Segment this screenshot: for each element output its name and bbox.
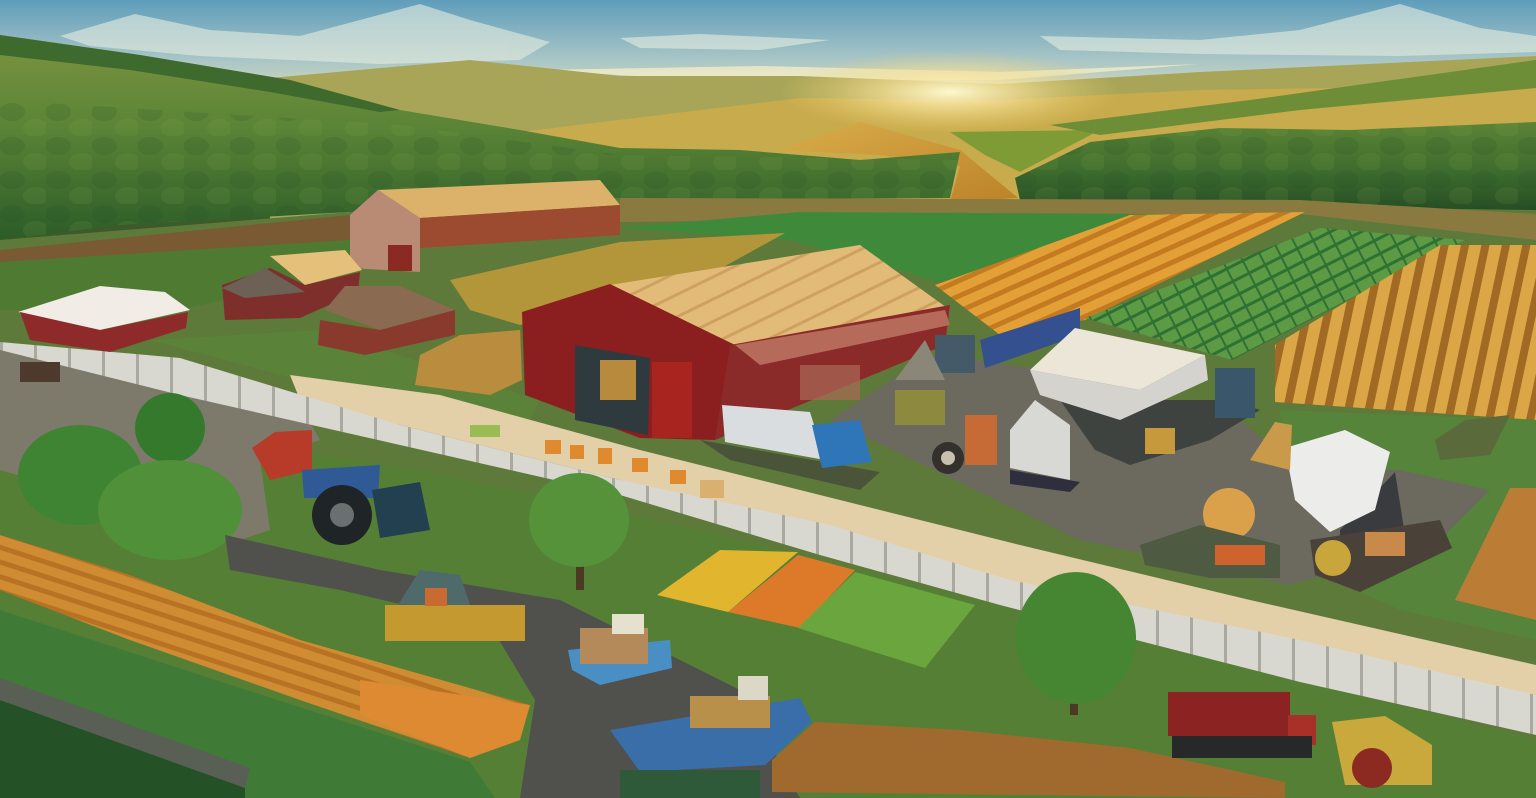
far left cart — [20, 362, 60, 382]
orange sphere equipment — [1140, 488, 1280, 578]
golden hill — [780, 122, 1018, 202]
red truck — [1168, 692, 1316, 758]
blue tractor — [302, 465, 430, 545]
back barn — [350, 180, 620, 272]
green meadow by hill — [950, 130, 1100, 172]
left road — [0, 345, 320, 540]
right tree — [1016, 572, 1136, 715]
tree center — [529, 473, 629, 590]
yellow harvester — [385, 570, 525, 641]
forest right — [1015, 122, 1536, 212]
ground base — [0, 198, 1536, 798]
bottom-right crop field — [1455, 488, 1536, 620]
small barn: brown roof — [318, 286, 455, 355]
yard road — [830, 355, 1490, 585]
small tractor right — [1435, 415, 1510, 460]
clouds — [60, 4, 1536, 64]
brown strip behind fields — [620, 198, 1536, 240]
brown strip behind barn — [0, 215, 350, 270]
blue boat cart — [568, 614, 672, 685]
barn front gable — [522, 284, 735, 440]
grass behind fence left — [150, 330, 540, 440]
white hopper machine — [1285, 430, 1452, 592]
bottom left grass — [0, 610, 495, 798]
field: golden rows — [1275, 245, 1536, 420]
forest right tree texture — [1015, 122, 1536, 212]
bottom left stone wall — [0, 678, 250, 788]
blue wagon — [610, 676, 812, 798]
sun glow — [780, 50, 1120, 134]
far hills — [270, 56, 1536, 220]
bottom left hedge — [0, 700, 245, 798]
small barn: white roof — [18, 286, 190, 352]
yard grass — [1280, 410, 1536, 640]
bushes — [18, 393, 242, 560]
white fence — [0, 342, 1536, 735]
white canopy shed — [1030, 328, 1260, 465]
forest left — [0, 35, 960, 240]
right hill band — [1050, 60, 1536, 135]
lower grass — [0, 440, 1536, 798]
field: orange rows — [935, 212, 1305, 335]
sky — [0, 0, 1536, 110]
beige path — [290, 375, 1536, 695]
hay pile right — [1250, 422, 1292, 470]
hay bales by barn — [415, 330, 522, 395]
colored crop panels — [657, 550, 975, 668]
white tanker truck — [700, 405, 880, 490]
barn side wall — [715, 305, 950, 440]
main red barn — [522, 245, 950, 440]
yellow tractor — [1332, 716, 1432, 788]
barn door opening — [575, 345, 650, 435]
red cart — [252, 430, 312, 480]
produce on path — [470, 425, 724, 498]
silo and orange tractor — [932, 400, 1080, 492]
orange crop strip — [0, 535, 530, 758]
dark ridge line — [0, 35, 400, 112]
small barn: tan roof — [222, 250, 362, 320]
brown crop strip bottom — [772, 722, 1285, 798]
field: wheat — [450, 233, 785, 325]
forest left tree texture — [0, 100, 960, 240]
green left meadow — [0, 240, 350, 310]
machinery cluster near field — [895, 308, 1080, 425]
barn roof — [610, 245, 950, 345]
field: green — [620, 212, 1165, 282]
curving road — [225, 535, 800, 798]
field: green checks — [1085, 228, 1465, 360]
